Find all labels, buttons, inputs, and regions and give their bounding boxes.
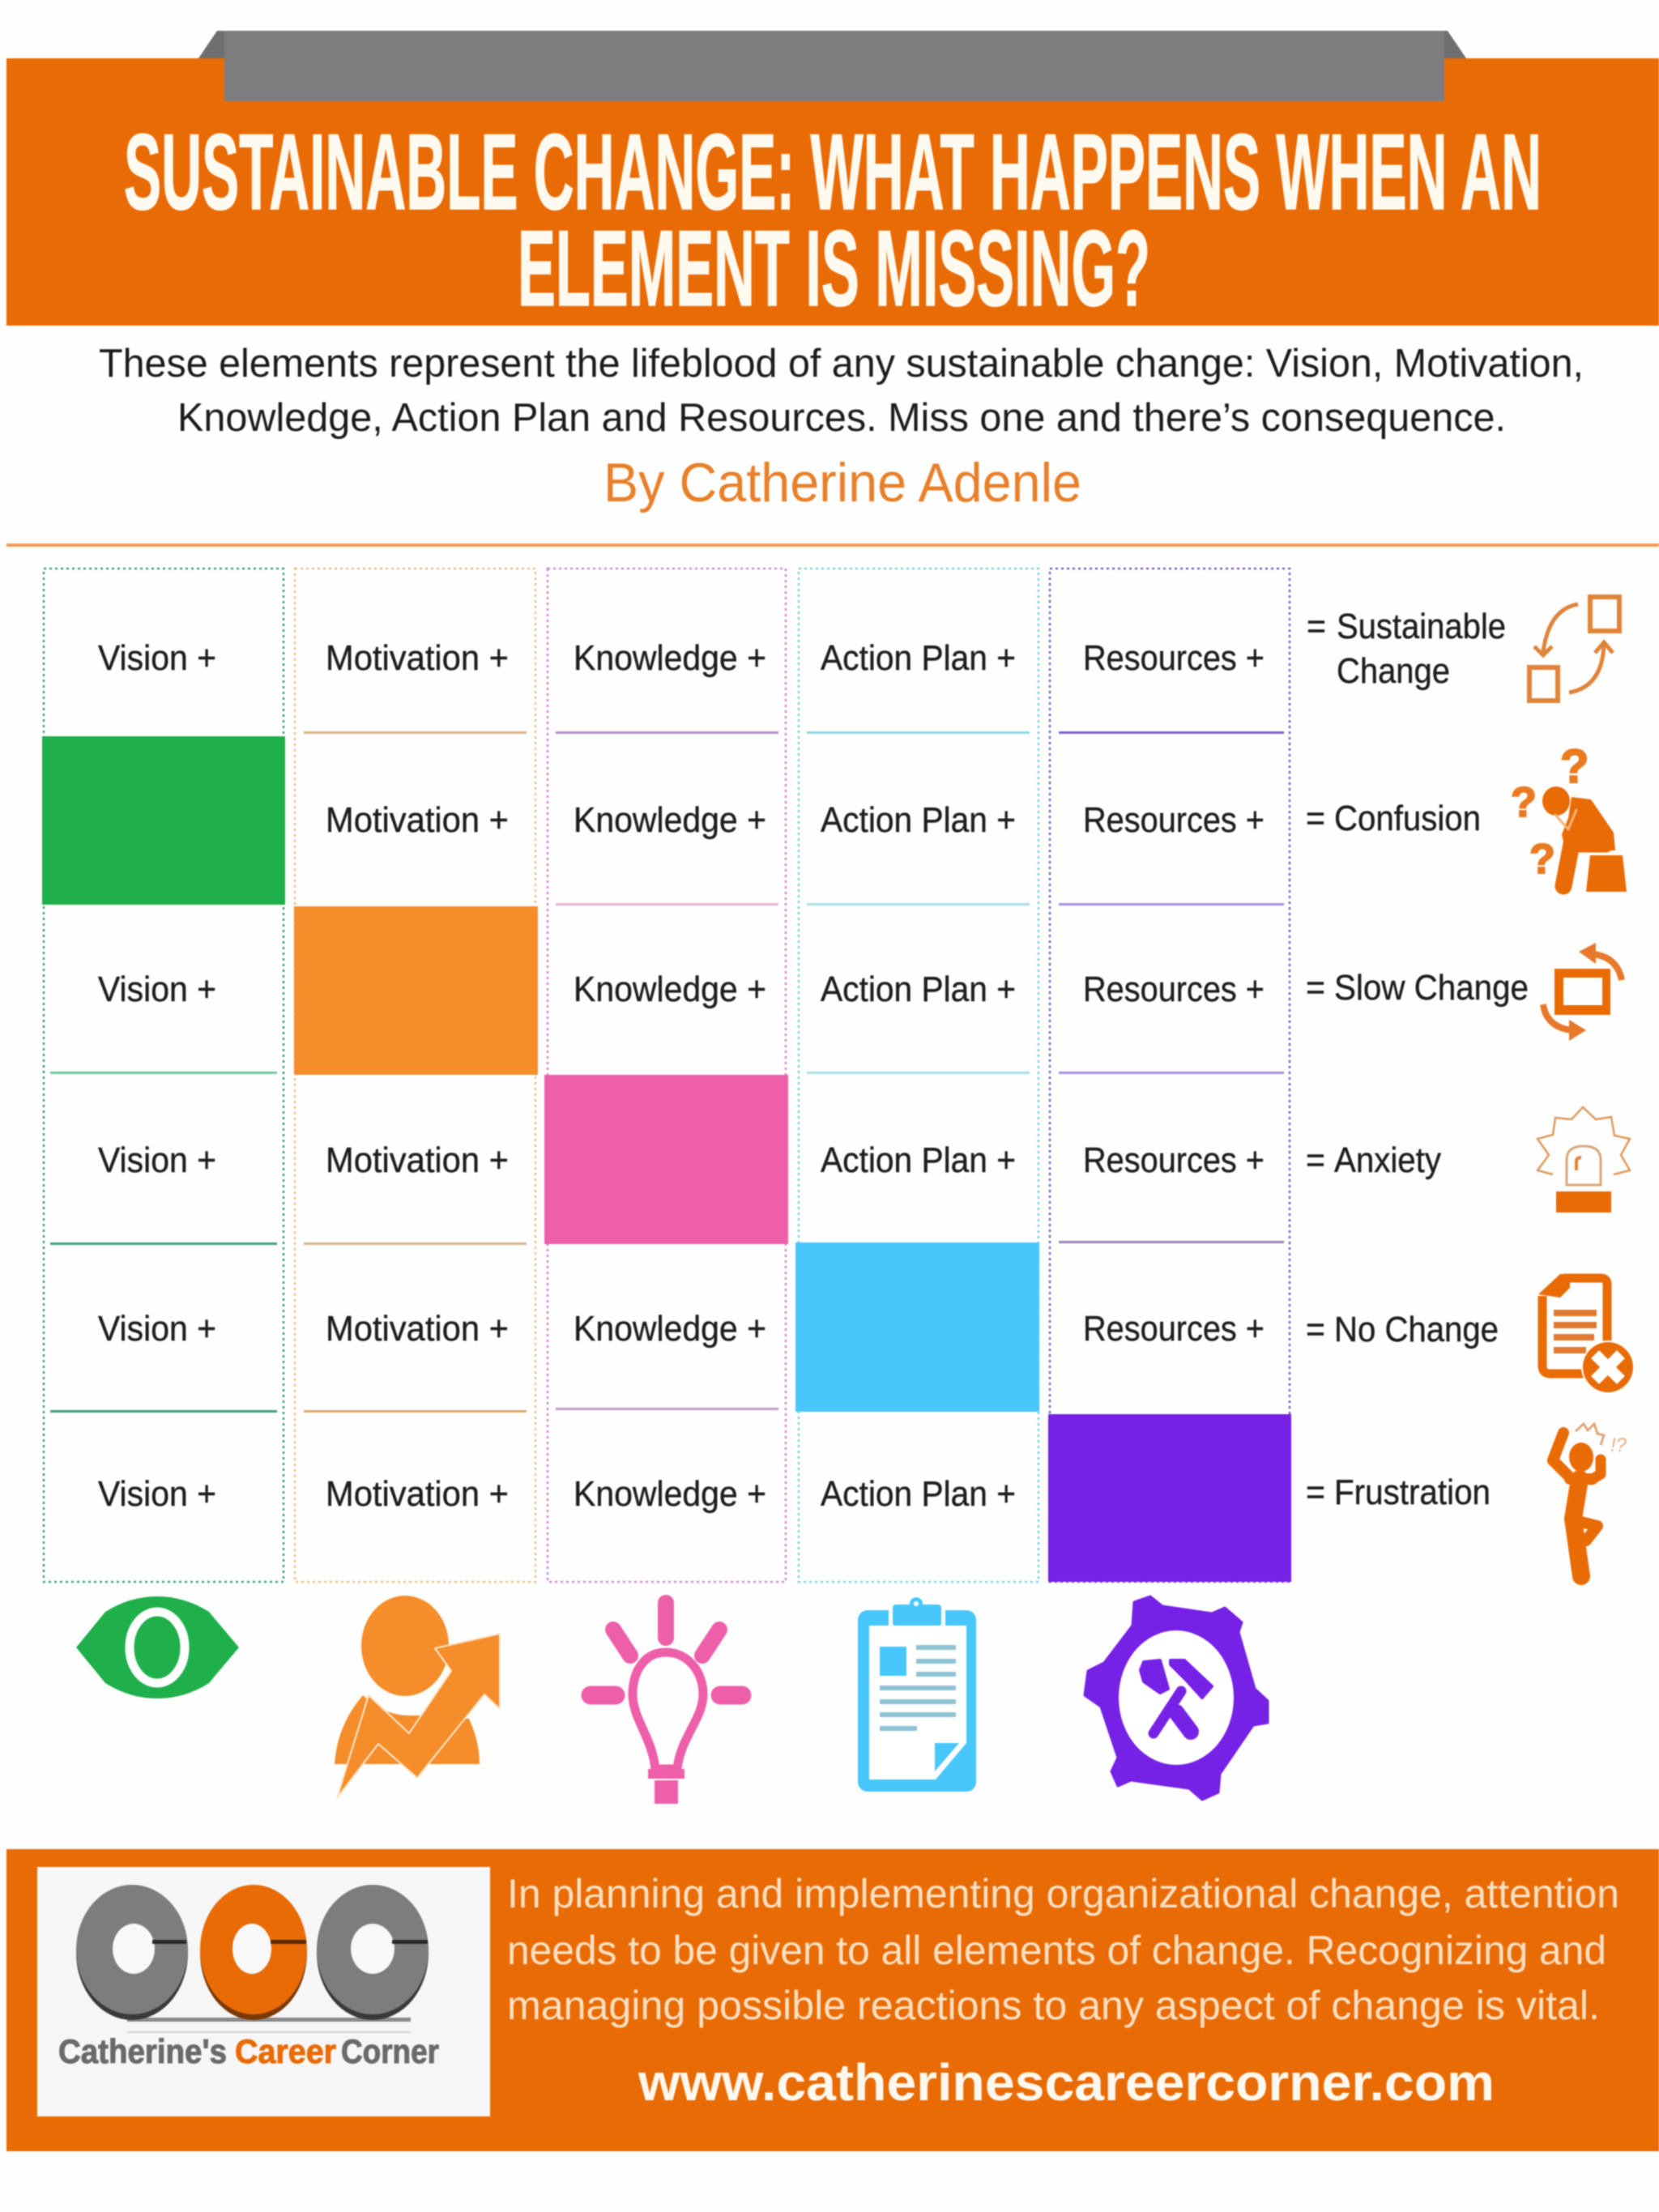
result label: sustainable change: = xyxy=(1307,607,1326,646)
column: Action Plan xyxy=(795,569,1039,1582)
column: Vision: Vision + xyxy=(98,1474,216,1514)
icon: alarm siren xyxy=(1537,1107,1630,1213)
logo wordmark xyxy=(58,2032,439,2070)
result label: slow change: = xyxy=(1306,968,1325,1008)
column: Action Plan: Action Plan + xyxy=(821,1474,1016,1514)
icon: confused person: ? xyxy=(1511,779,1537,826)
title xyxy=(124,113,1542,329)
column: Motivation: Motivation + xyxy=(326,638,509,678)
result label: confusion: Confusion xyxy=(1334,799,1481,838)
column: Action Plan: Action Plan + xyxy=(821,800,1016,840)
footer text block xyxy=(507,1871,1619,2028)
column: Motivation: Motivation + xyxy=(326,1140,509,1180)
logo wordmark: Corner xyxy=(341,2032,439,2070)
result label: anxiety: = xyxy=(1306,1140,1325,1180)
missing resources block xyxy=(1048,1414,1291,1582)
result label: sustainable change xyxy=(1307,607,1506,691)
result label: no change: No Change xyxy=(1334,1310,1499,1349)
intro text xyxy=(99,342,1584,440)
intro text: Knowledge, Action Plan and Resources. Miss one and there’s consequence. xyxy=(177,396,1506,440)
column: Vision: Vision + xyxy=(98,1309,216,1349)
result label: sustainable change: Change xyxy=(1337,651,1450,691)
column: Resources: Resources + xyxy=(1083,800,1265,840)
icon: clipboard (action plan) xyxy=(858,1597,976,1792)
column: Knowledge: Knowledge + xyxy=(574,638,766,678)
result label: frustration: Frustration xyxy=(1334,1473,1491,1512)
column: Knowledge: Knowledge + xyxy=(574,800,766,840)
logo wordmark: Career xyxy=(235,2032,336,2070)
footer text block: needs to be given to all elements of change. Recognizing and xyxy=(507,1928,1606,1973)
missing motivation block xyxy=(294,906,538,1075)
column: Knowledge xyxy=(544,569,788,1582)
icon: frustrated person xyxy=(1553,1424,1627,1576)
intro text: These elements represent the lifeblood of any sustainable change: Vision, Motivation, xyxy=(99,342,1584,386)
column: Knowledge: Knowledge + xyxy=(574,1309,766,1349)
column: Action Plan: Action Plan + xyxy=(821,1140,1016,1180)
column: Resources xyxy=(1048,569,1291,1582)
icon: sustainable change cycle xyxy=(1529,597,1619,701)
result label: anxiety: Anxiety xyxy=(1334,1140,1441,1180)
missing knowledge block xyxy=(544,1075,788,1244)
icon: person with rising arrow (motivation) xyxy=(335,1596,500,1798)
icon: slow change frame with arrows xyxy=(1543,943,1622,1041)
column: Vision xyxy=(42,569,285,1582)
column: Motivation: Motivation + xyxy=(326,1309,509,1349)
column: Resources: Resources + xyxy=(1083,1309,1265,1349)
result label: confusion: = xyxy=(1306,799,1325,838)
logo panel xyxy=(37,1867,490,2116)
column: Motivation: Motivation + xyxy=(326,800,509,840)
column: Vision: Vision + xyxy=(98,1140,216,1180)
column: Resources: Resources + xyxy=(1083,970,1265,1009)
column: Action Plan: Action Plan + xyxy=(821,638,1016,678)
icon: gear with tools (resources) xyxy=(1085,1596,1268,1800)
footer banner xyxy=(6,1849,1659,2151)
logo wordmark: Catherine's xyxy=(58,2032,227,2070)
result label: slow change: Slow Change xyxy=(1334,968,1529,1008)
footer text block: managing possible reactions to any aspect of change is vital. xyxy=(507,1983,1600,2028)
icon: eye (vision) xyxy=(76,1596,239,1698)
column: Motivation: Motivation + xyxy=(326,1474,509,1514)
header banner xyxy=(6,31,1659,329)
icon: confused person xyxy=(1511,740,1627,892)
byline: By Catherine Adenle xyxy=(603,452,1081,514)
column: Motivation xyxy=(294,569,538,1582)
icon: frustrated person: !? xyxy=(1610,1434,1627,1456)
website url: www.catherinescareercorner.com xyxy=(638,2053,1495,2112)
missing action plan block xyxy=(795,1242,1039,1412)
column: Resources: Resources + xyxy=(1083,638,1265,678)
result label: frustration: = xyxy=(1306,1473,1325,1512)
logo rings xyxy=(76,1885,429,2020)
footer text block: In planning and implementing organizational change, attention xyxy=(507,1871,1619,1916)
icon: confused person: ? xyxy=(1529,836,1555,883)
grey tab on banner xyxy=(198,31,1466,101)
icon: light bulb (knowledge) xyxy=(591,1603,742,1804)
icon: document with x xyxy=(1538,1274,1635,1394)
icon: confused person: ? xyxy=(1560,740,1589,793)
result label: no change: = xyxy=(1306,1310,1325,1349)
column: Action Plan: Action Plan + xyxy=(821,970,1016,1009)
column: Knowledge: Knowledge + xyxy=(574,970,766,1009)
column: Knowledge: Knowledge + xyxy=(574,1474,766,1514)
column: Vision: Vision + xyxy=(98,970,216,1009)
column: Resources: Resources + xyxy=(1083,1140,1265,1180)
column: Vision: Vision + xyxy=(98,638,216,678)
missing vision block xyxy=(42,736,285,905)
result label: sustainable change: Sustainable xyxy=(1337,607,1506,646)
